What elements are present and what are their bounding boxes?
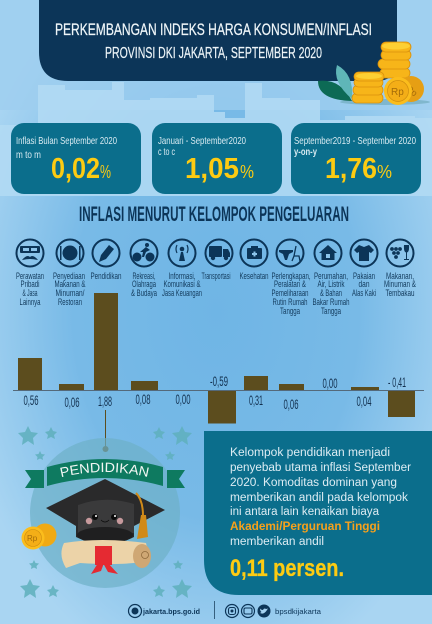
card: calendar: 1,05 bbox=[185, 153, 239, 185]
card: year on year: 1,76 bbox=[325, 153, 377, 185]
category labels: Olahraga bbox=[132, 279, 156, 289]
panel: explanation: 0,11 persen. bbox=[230, 555, 344, 582]
icon: glasses and moustache bbox=[16, 240, 44, 266]
bar chart: 0,56 bbox=[24, 393, 38, 408]
connector line bbox=[102, 410, 108, 452]
category labels: Peralatan & bbox=[274, 279, 306, 289]
graduation cap bbox=[46, 479, 165, 544]
card: calendar: % bbox=[240, 162, 254, 182]
category labels: & Bahan bbox=[320, 288, 342, 298]
category labels: Pemeliharaan bbox=[272, 288, 308, 298]
bar chart: 0,04 bbox=[356, 394, 372, 409]
bar chart: - 0,41 bbox=[388, 375, 406, 390]
category labels: Minuman/ bbox=[56, 288, 85, 298]
bar chart bbox=[13, 293, 424, 424]
icon: truck bbox=[206, 240, 232, 266]
icon: house bbox=[314, 240, 342, 266]
category labels: Rekreasi, bbox=[132, 271, 156, 281]
category labels: Perawatan bbox=[16, 271, 44, 281]
category labels bbox=[16, 271, 416, 316]
panel: explanation: memberikan andil bbox=[230, 536, 324, 548]
category labels: Pakaian bbox=[353, 271, 375, 281]
category labels: Restoran bbox=[58, 297, 82, 307]
icon: table and chair bbox=[276, 240, 304, 266]
panel: explanation: penyebab utama inflasi September bbox=[230, 462, 411, 474]
category labels: Bakar Rumah bbox=[312, 297, 350, 307]
category labels: Lainnya bbox=[20, 297, 40, 307]
category labels: Perumahan, bbox=[314, 271, 348, 281]
icon: cyclist bbox=[130, 240, 158, 266]
category labels: dan bbox=[358, 279, 370, 289]
icon: plate and cutlery bbox=[56, 240, 84, 266]
category labels: Alas Kaki bbox=[352, 288, 376, 298]
card: year on year: % bbox=[377, 162, 392, 182]
bar chart: 1,88 bbox=[98, 394, 112, 409]
illustration: graduation cap and diploma bbox=[22, 438, 185, 588]
footer: website bbox=[128, 604, 200, 618]
category labels: Tembakau bbox=[386, 288, 414, 298]
card: calendar: c to c bbox=[158, 146, 175, 158]
category labels: Kesehatan bbox=[240, 271, 268, 281]
bar chart: 0,31 bbox=[249, 393, 263, 408]
icon: coins and leaves: Rp bbox=[404, 83, 419, 98]
icon: wireless signal bbox=[168, 240, 196, 266]
bar chart: 0,06 bbox=[284, 397, 298, 412]
card: month to month: 0,02 bbox=[51, 153, 100, 185]
category labels: Perlengkapan, bbox=[272, 271, 310, 281]
category labels: Minuman & bbox=[384, 279, 416, 289]
category labels: Pribadi bbox=[20, 279, 40, 289]
icon: coins and leaves: Rp bbox=[391, 87, 404, 98]
card: month to month bbox=[11, 123, 141, 194]
panel: explanation bbox=[204, 431, 432, 595]
category labels: & Jasa bbox=[22, 288, 38, 298]
card: month to month: % bbox=[100, 162, 111, 182]
footer: social media bbox=[226, 604, 322, 618]
footer: website: jakarta.bps.go.id bbox=[142, 607, 200, 616]
bar chart: 0,06 bbox=[64, 395, 80, 410]
category labels: & Budaya bbox=[131, 288, 157, 298]
card: month to month: m to m bbox=[16, 149, 41, 161]
category labels: Penyediaan bbox=[53, 271, 85, 281]
panel: explanation: Kelompok pendidikan menjadi bbox=[230, 447, 390, 459]
icon: grapes and wine glass bbox=[386, 240, 414, 266]
category labels: Komunikasi & bbox=[164, 279, 200, 289]
header banner bbox=[39, 0, 397, 81]
bar chart: -0,59 bbox=[210, 374, 228, 389]
card: month to month: Inflasi Bulan September 2020 bbox=[16, 135, 117, 147]
category labels: Rutin Rumah bbox=[272, 297, 308, 307]
stars decoration bbox=[18, 426, 192, 598]
category labels: Jasa Keuangan bbox=[162, 288, 202, 298]
category labels: Informasi, bbox=[168, 271, 196, 281]
bar chart: 0,00 bbox=[322, 376, 338, 391]
coins: Rp bbox=[27, 534, 38, 543]
card: year on year: y-on-y bbox=[294, 146, 317, 158]
bar chart: 0,08 bbox=[136, 392, 150, 407]
category labels: Tangga bbox=[280, 306, 300, 316]
icon: pencil bbox=[92, 240, 120, 266]
panel: explanation: 2020. Komoditas dominan yang bbox=[230, 477, 397, 489]
coins bbox=[22, 524, 56, 550]
icon: coins and leaves bbox=[318, 42, 430, 105]
category labels: Air, Listrik bbox=[318, 279, 345, 289]
category labels: Pendidikan bbox=[90, 271, 122, 281]
ribbon banner: PENDIDIKAN bbox=[60, 462, 149, 477]
card: year on year bbox=[291, 123, 421, 194]
icon: first aid kit bbox=[240, 240, 268, 266]
category labels: Makanan, bbox=[386, 271, 414, 281]
ribbon banner bbox=[25, 459, 185, 488]
category labels: Tangga bbox=[321, 306, 341, 316]
footer: social media: bpsdkijakarta bbox=[275, 607, 322, 616]
card: calendar: Januari - September2020 bbox=[158, 135, 246, 147]
panel: explanation: Akademi/Perguruan Tinggi bbox=[230, 521, 380, 533]
panel: explanation: ini antara lain kenaikan biaya bbox=[230, 506, 380, 518]
icon: t-shirt bbox=[350, 240, 378, 266]
subtitle: PROVINSI DKI JAKARTA, SEPTEMBER 2020 bbox=[105, 45, 322, 62]
card: calendar bbox=[152, 123, 282, 194]
category labels: Transportasi bbox=[202, 271, 230, 281]
diploma scroll bbox=[61, 540, 151, 574]
panel: explanation: memberikan andil pada kelompok bbox=[230, 492, 408, 504]
bar chart: 0,00 bbox=[176, 392, 190, 407]
category labels: Makanan & bbox=[54, 279, 86, 289]
